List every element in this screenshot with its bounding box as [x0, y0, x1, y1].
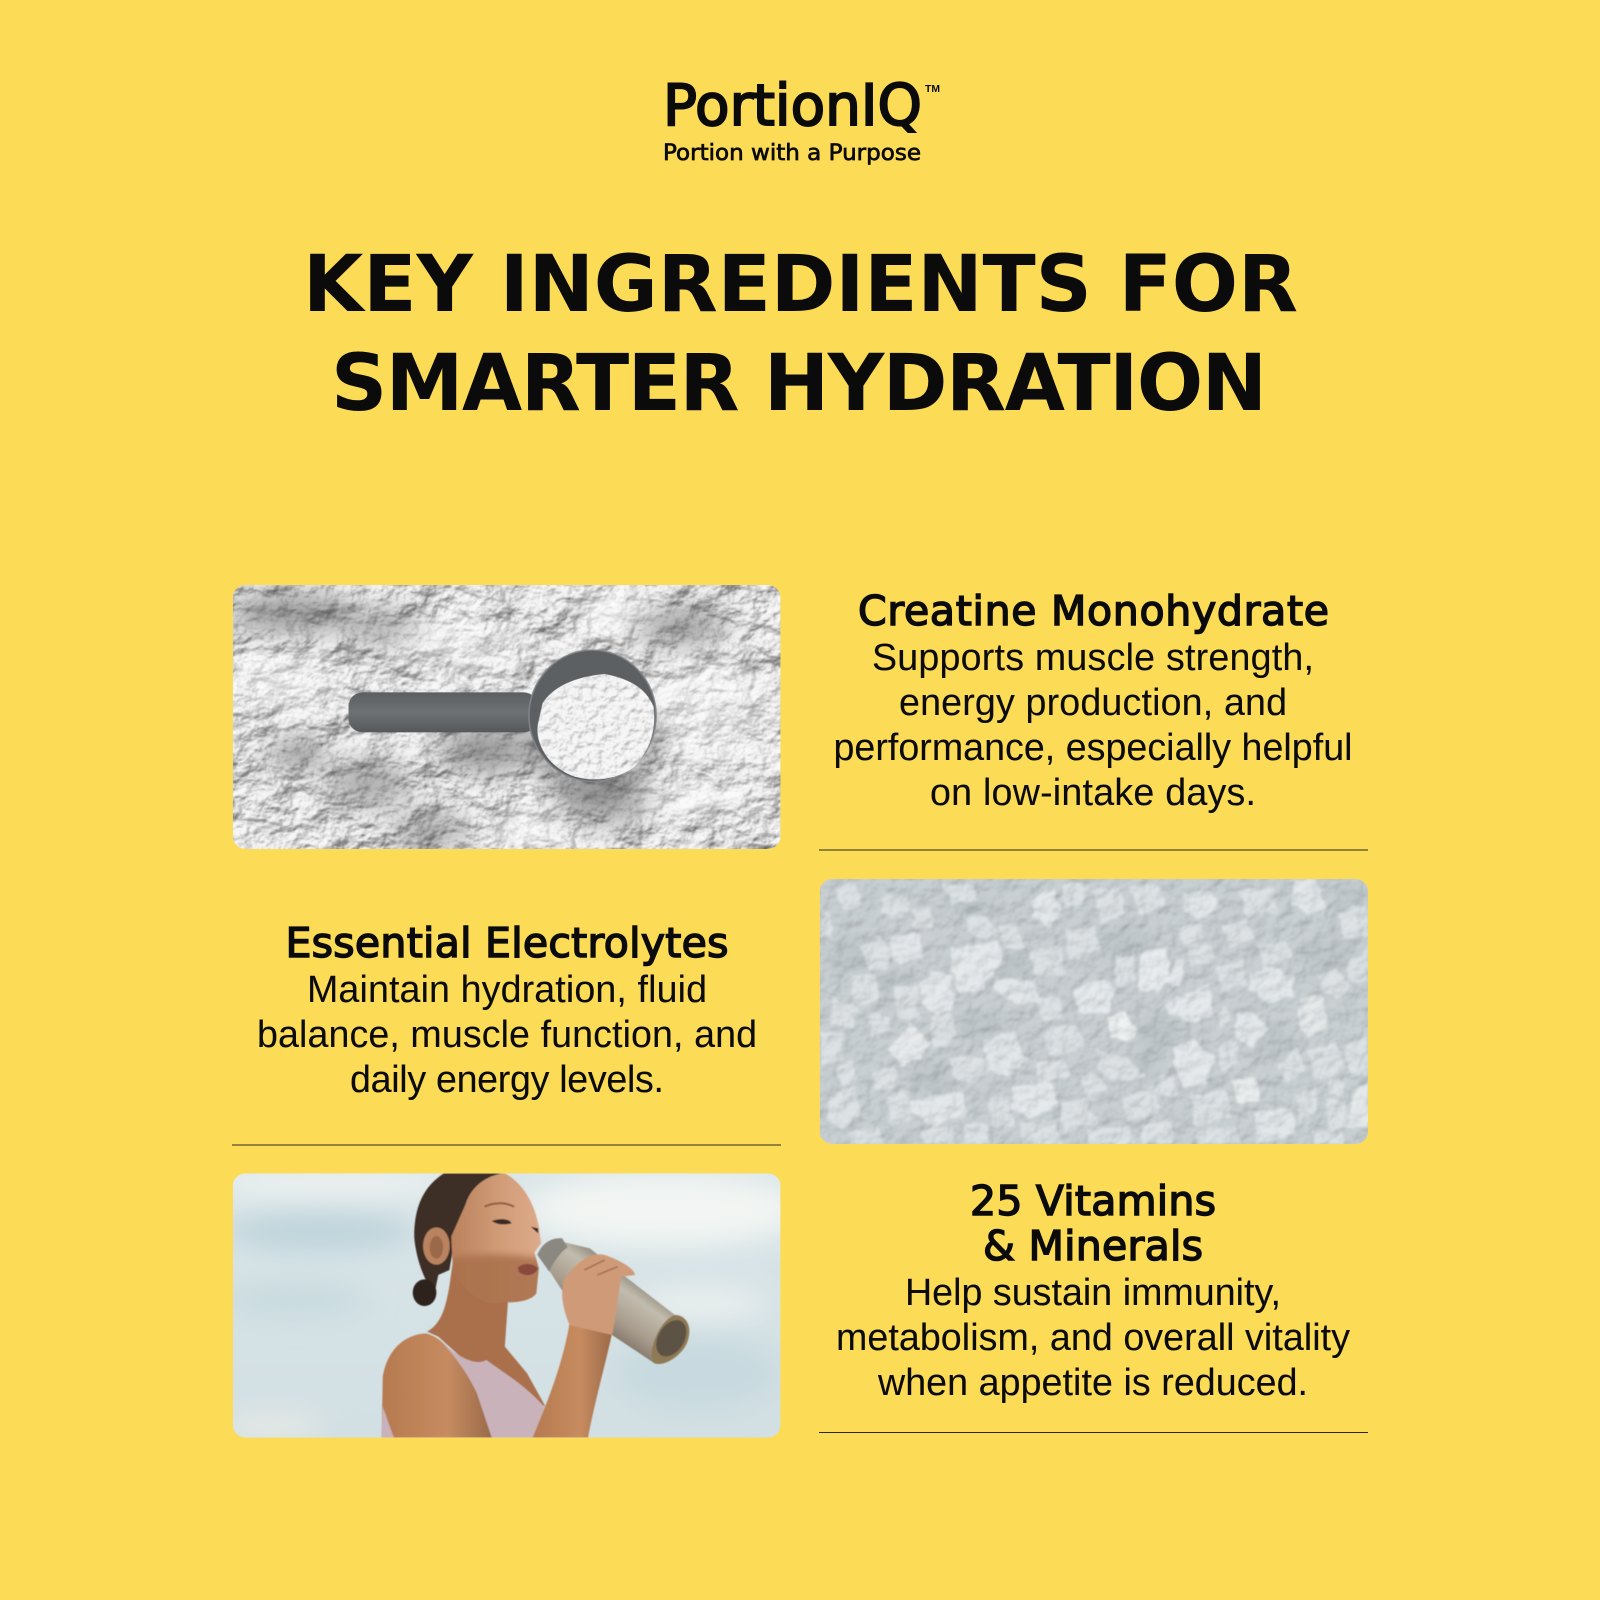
divider: [819, 1432, 1368, 1433]
ear: [423, 1227, 450, 1265]
bottle body: [542, 1240, 675, 1363]
Essential Electrolytes text: [257, 919, 757, 1100]
forearm: [533, 1323, 612, 1438]
25 Vitamins and Minerals text: when appetite is reduced.: [877, 1361, 1308, 1403]
heading: Essential Electrolytes: [286, 919, 728, 967]
scoop cup: [529, 650, 656, 781]
heading: Creatine Monohydrate: [858, 587, 1329, 635]
image: salt crystals: [820, 879, 1368, 1144]
description: Help sustain immunity,: [905, 1271, 1281, 1313]
crystals: [821, 880, 1368, 1144]
title: KEY INGREDIENTS FOR: [303, 240, 1298, 330]
powder in cup: [537, 674, 654, 780]
hand: [562, 1254, 635, 1335]
arm and shoulder: [382, 1333, 492, 1438]
Creatine Monohydrate text: performance, especially helpful: [834, 726, 1352, 768]
woman figure: [382, 1170, 692, 1438]
image: powder with scoop: [227, 585, 780, 849]
image: woman drinking from bottle: [213, 1170, 804, 1442]
logo wordmark: PortionIQ: [663, 73, 922, 139]
face: [450, 1174, 542, 1303]
25 Vitamins and Minerals text: metabolism, and overall vitality: [836, 1316, 1350, 1358]
hair: [414, 1173, 505, 1293]
neck: [427, 1260, 546, 1407]
Essential Electrolytes text: balance, muscle function, and: [257, 1013, 757, 1055]
25 Vitamins and Minerals text: [836, 1177, 1350, 1403]
lips: [518, 1264, 538, 1275]
divider: [232, 1144, 781, 1146]
heading: 25 Vitamins: [970, 1177, 1216, 1225]
trademark: TM: [925, 84, 940, 95]
bottle cap rim: [537, 1238, 568, 1272]
tank top: [438, 1338, 546, 1438]
hair bun: [413, 1279, 436, 1306]
Creatine Monohydrate text: [834, 587, 1352, 813]
Creatine Monohydrate text: on low-intake days.: [930, 771, 1256, 813]
scoop: [349, 650, 664, 800]
description: Supports muscle strength,: [872, 636, 1314, 678]
tagline: Portion with a Purpose: [663, 141, 921, 166]
divider: [819, 850, 1368, 851]
eye and brow: [492, 1219, 511, 1224]
title: SMARTER HYDRATION: [331, 339, 1267, 429]
bottle: [537, 1238, 692, 1364]
logo: PortionIQ: [663, 73, 940, 166]
25 Vitamins and Minerals text: & Minerals: [983, 1222, 1203, 1270]
title: [303, 240, 1298, 429]
description: Maintain hydration, fluid: [307, 968, 707, 1010]
Creatine Monohydrate text: energy production, and: [899, 681, 1287, 723]
scoop handle: [349, 692, 537, 732]
Essential Electrolytes text: daily energy levels.: [350, 1058, 664, 1100]
